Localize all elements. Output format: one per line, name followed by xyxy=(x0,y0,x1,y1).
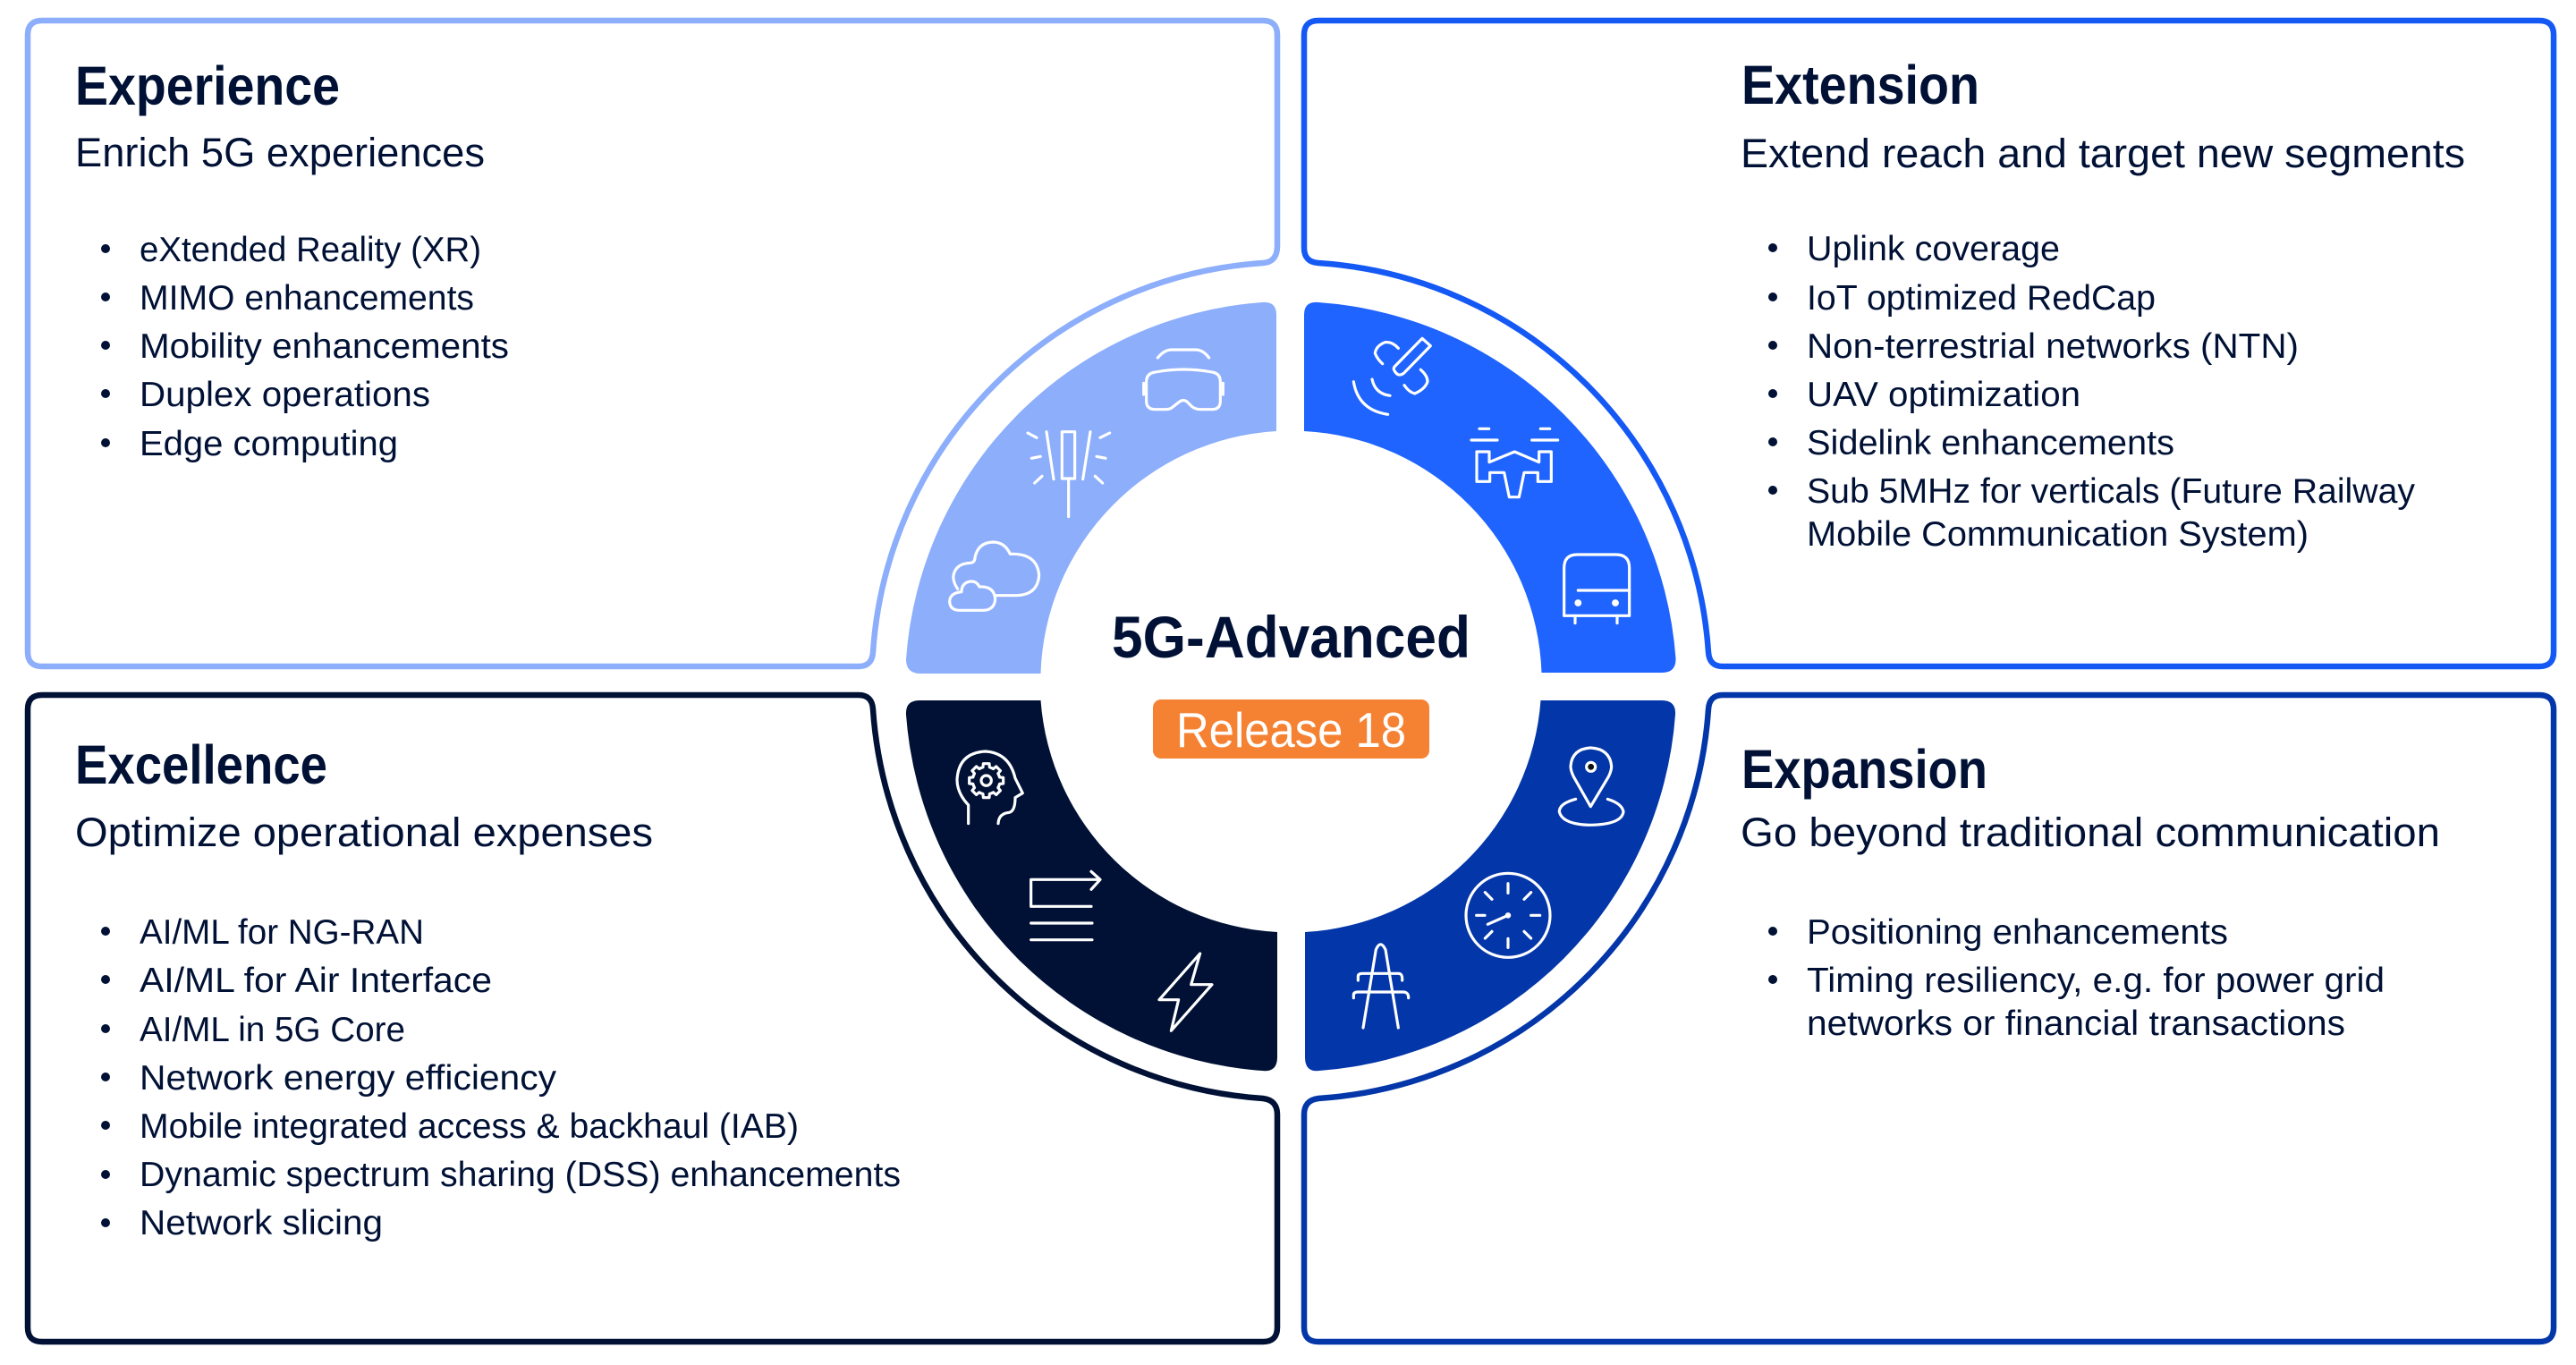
icon: power pylon xyxy=(1353,945,1409,1028)
heading: Excellence: Excellence xyxy=(75,734,327,795)
panel: Excellence xyxy=(28,695,1277,1342)
bullet list: Expansion: Timing resiliency, e.g. for power grid xyxy=(1807,962,2385,1000)
bullet list: Excellence xyxy=(101,913,901,1242)
icon: clock gauge xyxy=(1466,873,1550,957)
heading: Extension: Extension xyxy=(1741,55,1979,115)
icon: lightning bolt xyxy=(1159,954,1212,1030)
icon: clouds xyxy=(950,542,1039,610)
panel frame: Expansion xyxy=(1304,695,2554,1342)
bullet list: Experience: eXtended Reality (XR) xyxy=(140,231,481,269)
panel: Extension xyxy=(1304,21,2554,666)
bullet list: Extension: IoT optimized RedCap xyxy=(1807,279,2156,318)
bullet list: Experience xyxy=(101,231,509,463)
icon: antenna xyxy=(1028,432,1110,517)
bullet list: Excellence: Dynamic spectrum sharing (DSS) enhancements xyxy=(140,1156,901,1194)
bullet list: Experience: Edge computing xyxy=(140,425,398,463)
bullet list: Extension: Sidelink enhancements xyxy=(1807,424,2174,462)
bullet list: Expansion: networks or financial transactions xyxy=(1807,1005,2345,1043)
bullet list: Expansion xyxy=(1768,913,2385,1043)
bullet list: Experience: MIMO enhancements xyxy=(140,279,474,318)
subheading: Extension: Extend reach and target new segments xyxy=(1741,131,2465,176)
bullet list: Extension: Mobile Communication System) xyxy=(1807,515,2309,554)
ring segment: light blue xyxy=(906,302,1276,674)
bullet list: Experience: Duplex operations xyxy=(140,376,430,414)
ring segment: dark blue xyxy=(1305,700,1675,1071)
icon: VR headset xyxy=(1144,350,1223,410)
icon: drone xyxy=(1471,428,1558,497)
bullet list: Excellence: AI/ML in 5G Core xyxy=(140,1011,405,1049)
bullet list: Extension: Non-terrestrial networks (NTN) xyxy=(1807,327,2299,366)
icon: arrow and lines xyxy=(1031,871,1100,940)
badge: Release 18: Release 18 xyxy=(1176,702,1406,758)
bullet list: Extension: Sub 5MHz for verticals (Future Railway xyxy=(1807,472,2415,511)
icon: bus xyxy=(1564,555,1630,623)
bullet list: Excellence: AI/ML for NG-RAN xyxy=(140,913,424,952)
panel: Experience xyxy=(28,21,1277,666)
panel frame: Experience xyxy=(28,21,1277,666)
subheading: Expansion: Go beyond traditional communication xyxy=(1741,810,2440,855)
icon: location pin xyxy=(1559,748,1623,825)
bullet list: Experience: Mobility enhancements xyxy=(140,327,509,366)
icon: head with gear xyxy=(957,751,1022,824)
subheading: Excellence: Optimize operational expenses xyxy=(75,810,653,855)
bullet list: Excellence: Mobile integrated access & backhaul (IAB) xyxy=(140,1107,799,1146)
bullet list: Excellence: Network energy efficiency xyxy=(140,1059,557,1098)
bullet list: Extension xyxy=(1768,230,2415,554)
ring segment: navy xyxy=(906,700,1277,1071)
panel frame: Excellence xyxy=(28,695,1277,1342)
bullet list: Expansion: Positioning enhancements xyxy=(1807,913,2228,952)
heading: Experience: Experience xyxy=(75,55,340,116)
bullet list: Extension: Uplink coverage xyxy=(1807,230,2060,268)
bullet list: Excellence: AI/ML for Air Interface xyxy=(140,962,492,1000)
ring segment: bright blue xyxy=(1304,302,1676,673)
heading: Expansion: Expansion xyxy=(1741,739,1987,800)
panel: Expansion xyxy=(1304,695,2554,1342)
icon: satellite xyxy=(1353,338,1430,414)
panel frame: Extension xyxy=(1304,21,2554,666)
bullet list: Excellence: Network slicing xyxy=(140,1204,383,1242)
center title: 5G-Advanced xyxy=(1112,604,1470,670)
bullet list: Extension: UAV optimization xyxy=(1807,376,2080,414)
subheading: Experience: Enrich 5G experiences xyxy=(75,130,485,175)
